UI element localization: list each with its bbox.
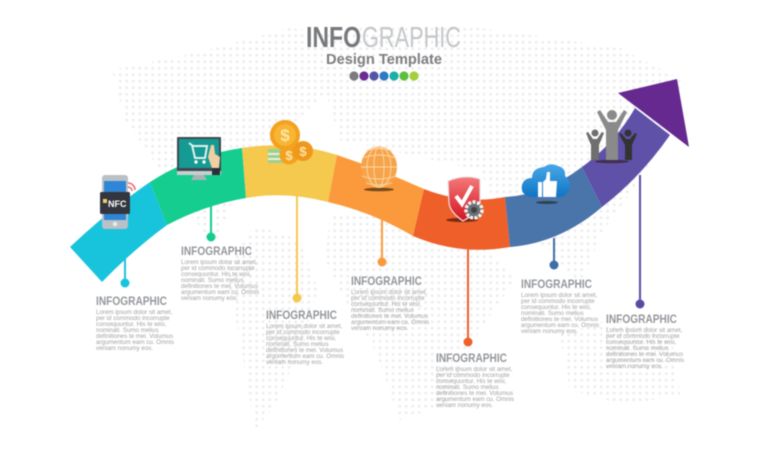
segment 1 cyan [70, 182, 167, 282]
text block 4: INFOGRAPHIC [351, 274, 422, 288]
text block 3: INFOGRAPHIC [266, 308, 337, 322]
text block 5: Lorem ipsum dolor sit amet, [436, 366, 513, 373]
text block 4: argumentum eam cu. Omnis [351, 319, 429, 326]
stems and markers [120, 175, 644, 346]
icon: NFC phone [100, 175, 135, 229]
text block 3: definitiones te mei. Volumus [266, 347, 343, 354]
text block 7: argumentum eam cu. Omnis [606, 357, 684, 364]
world map dot background [112, 28, 682, 430]
icon: coins and cash: $ [285, 148, 293, 163]
text block 6: veniam nonumy eos. [521, 328, 578, 335]
text block 1: veniam nonumy eos. [96, 345, 153, 352]
marker 4 [378, 215, 386, 266]
colour dots [349, 71, 419, 81]
marker 3 [292, 195, 302, 302]
text block 4: Lorem ipsum dolor sit amet, [351, 289, 428, 296]
text block 6: INFOGRAPHIC [521, 277, 592, 291]
icon: NFC phone: NFC [108, 199, 127, 209]
text block 2: per id commodo incorrupte [181, 265, 255, 272]
text block 4: veniam nonumy eos. [351, 325, 408, 332]
text block 5: INFOGRAPHIC [436, 351, 507, 365]
text block 4: per id commodo incorrupte [351, 295, 425, 302]
text block 2: veniam nonumy eos. [181, 295, 238, 302]
segment 6 blue [505, 167, 602, 247]
subtitle: Design Template [326, 52, 442, 68]
icon: coins and cash [268, 120, 313, 164]
text block 6: argumentum eam cu. Omnis [521, 322, 599, 329]
text block 5: definitiones te mei. Volumus [436, 390, 513, 397]
text block 7: veniam nonumy eos. [606, 363, 663, 370]
arrow ribbon [70, 79, 689, 282]
text block 4: definitiones te mei. Volumus [351, 313, 428, 320]
text block 2 [181, 244, 259, 302]
text block 5: nominati. Sumo melius [436, 384, 499, 391]
text block 4: consequuntur. His te wisi, [351, 301, 421, 308]
marker 5 [464, 245, 472, 346]
text block 7: nominati. Sumo melius [606, 345, 669, 352]
icon: people [586, 110, 637, 163]
text block 1 [96, 294, 174, 352]
text block 7: Lorem ipsum dolor sit amet, [606, 327, 683, 334]
text block 6 [521, 277, 599, 335]
text block 3: argumentum eam cu. Omnis [266, 353, 344, 360]
text block 1: Lorem ipsum dolor sit amet, [96, 309, 173, 316]
text block 2: consequuntur. His te wisi, [181, 271, 251, 278]
text block 3: per id commodo incorrupte [266, 329, 340, 336]
icon: coins and cash: $ [299, 144, 307, 159]
text block 1: consequuntur. His te wisi, [96, 321, 166, 328]
text block 3: consequuntur. His te wisi, [266, 335, 336, 342]
text block 5: veniam nonumy eos. [436, 402, 493, 409]
icon: cloud with thumbs up [522, 164, 570, 204]
text block 7: INFOGRAPHIC [606, 312, 677, 326]
segment 3 yellow [242, 145, 337, 202]
marker 2 [206, 205, 216, 242]
segment 7 violet [582, 108, 670, 207]
text block 1: argumentum eam cu. Omnis [96, 339, 174, 346]
icon: shield with gear [446, 177, 482, 222]
text block 3 [266, 308, 344, 366]
text block 6: consequuntur. His te wisi, [521, 304, 591, 311]
text block 2: argumentum eam cu. Omnis [181, 289, 259, 296]
text block 4 [351, 274, 429, 332]
text block 2: Lorem ipsum dolor sit amet, [181, 259, 258, 266]
marker 6 [550, 238, 558, 270]
title [306, 22, 461, 81]
text block 1: definitiones te mei. Volumus [96, 333, 173, 340]
text block 6: Lorem ipsum dolor sit amet, [521, 292, 598, 299]
text block 5: per id commodo incorrupte [436, 372, 510, 379]
text block 3: veniam nonumy eos. [266, 359, 323, 366]
title: INFO: INFO [306, 22, 361, 54]
text block 2: definitiones te mei. Volumus [181, 283, 258, 290]
text block 6: per id commodo incorrupte [521, 298, 595, 305]
text block 5: argumentum eam cu. Omnis [436, 396, 514, 403]
arrow head [618, 79, 689, 147]
text block 5: consequuntur. His te wisi, [436, 378, 506, 385]
text block 7: definitiones te mei. Volumus [606, 351, 683, 358]
text block 1: per id commodo incorrupte [96, 315, 170, 322]
text block 7: per id commodo incorrupte [606, 333, 680, 340]
segment 2 green [150, 148, 246, 225]
text block 4: nominati. Sumo melius [351, 307, 414, 314]
text block 2: nominati. Sumo melius [181, 277, 244, 284]
marker 7 [636, 175, 644, 308]
title: GRAPHIC: GRAPHIC [362, 22, 461, 54]
text block 2: INFOGRAPHIC [181, 244, 252, 258]
icon: monitor with cart [177, 137, 221, 180]
text block 6: nominati. Sumo melius [521, 310, 584, 317]
text block 1: nominati. Sumo melius [96, 327, 159, 334]
text block 3: nominati. Sumo melius [266, 341, 329, 348]
text block 1: INFOGRAPHIC [96, 294, 167, 308]
marker 1 [120, 255, 130, 288]
text block 7: consequuntur. His te wisi, [606, 339, 676, 346]
segment 4 orange [328, 155, 424, 236]
icon: coins and cash: $ [280, 126, 290, 145]
text block 3: Lorem ipsum dolor sit amet, [266, 323, 343, 330]
text block 5 [436, 351, 514, 409]
segment 5 red-orange [413, 189, 510, 250]
text block 7 [606, 312, 684, 370]
text block 6: definitiones te mei. Volumus [521, 316, 598, 323]
icon: globe [361, 146, 397, 191]
